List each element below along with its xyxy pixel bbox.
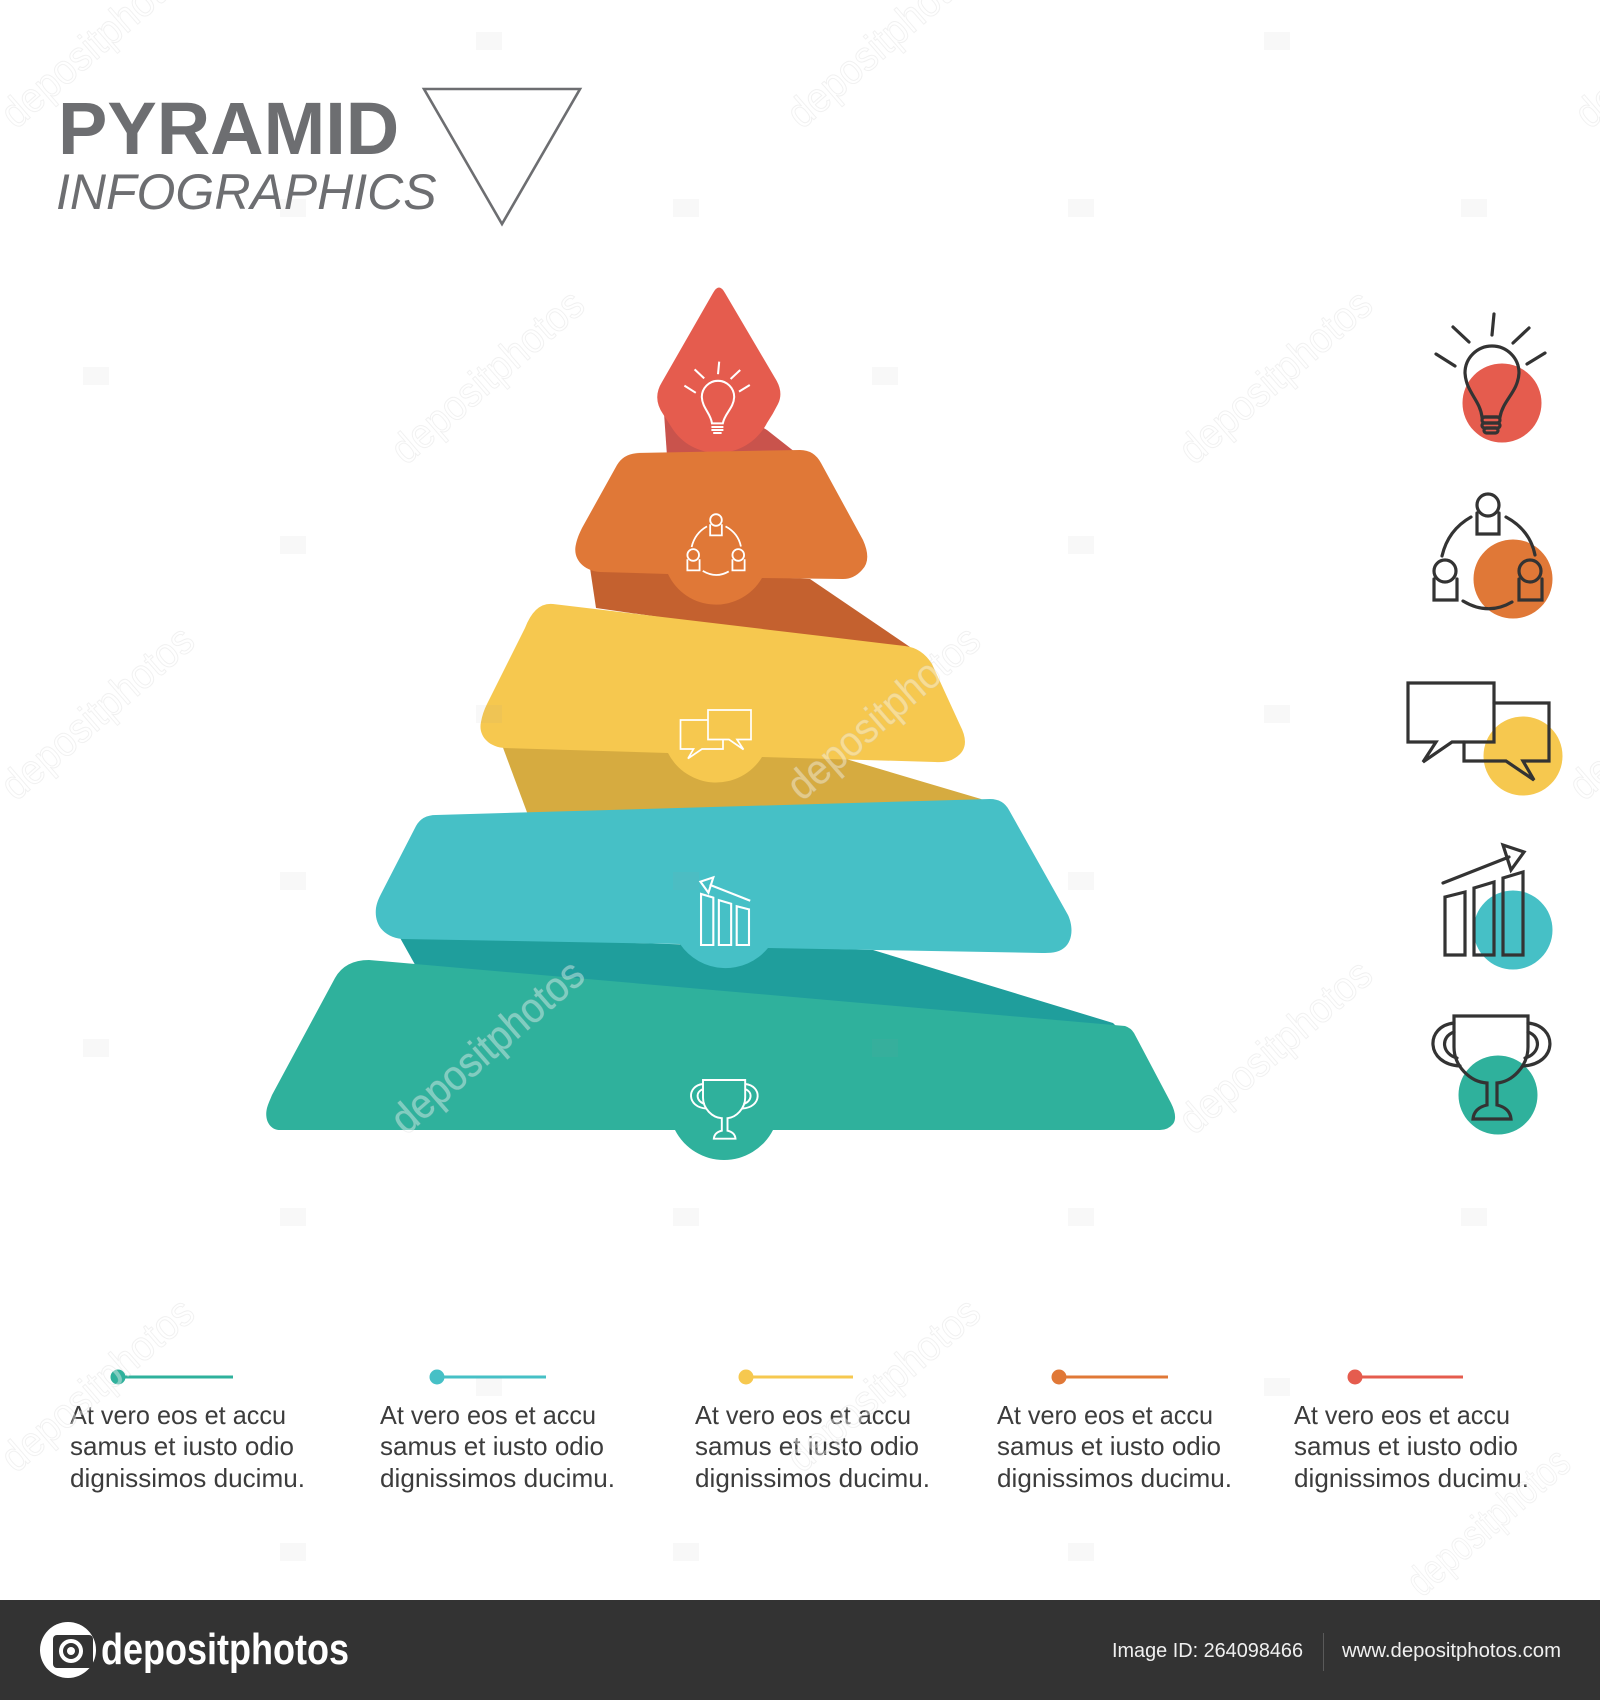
icon: small trophy (691, 1080, 758, 1139)
legend item: teal: At vero eos et accu (380, 1402, 596, 1430)
legend item: teal: dignissimos ducimu. (380, 1465, 615, 1493)
legend item: orange: samus et iusto odio (997, 1433, 1221, 1461)
icon: small lightbulb (684, 362, 750, 433)
watermark layer: depositphotos (1169, 950, 1381, 1143)
watermark layer: depositphotos (777, 616, 989, 809)
footer image id: Image ID: 264098466 (1112, 1640, 1303, 1662)
legend item: teal (380, 1370, 615, 1493)
pyramid chart (266, 288, 1175, 1160)
icon: footer camera logo (40, 1622, 96, 1678)
watermark layer: depositphotos (381, 280, 593, 473)
legend item: red: At vero eos et accu (1294, 1402, 1510, 1430)
tier 5 green (266, 960, 1175, 1160)
legend item: green (70, 1370, 305, 1493)
title: INFOGRAPHICS (56, 164, 437, 220)
tier 1 red (657, 288, 800, 456)
footer website: www.depositphotos.com (1341, 1640, 1561, 1662)
icon: large trophy (1433, 1016, 1550, 1134)
tier 3 yellow (480, 604, 990, 815)
tier 4 teal (376, 799, 1120, 1030)
icon: large bar chart (1443, 845, 1552, 970)
legend item: red: samus et iusto odio (1294, 1433, 1518, 1461)
footer divider (1323, 1633, 1324, 1671)
title: PYRAMID (58, 87, 399, 170)
icon: small bar chart (700, 877, 750, 945)
legend item: orange (997, 1370, 1232, 1493)
legend item: orange: dignissimos ducimu. (997, 1465, 1232, 1493)
legend item: green: dignissimos ducimu. (70, 1465, 305, 1493)
legend item: red: dignissimos ducimu. (1294, 1465, 1529, 1493)
footer brand name: depositphotos (101, 1625, 349, 1674)
title (56, 87, 437, 220)
legend item: yellow: At vero eos et accu (695, 1402, 911, 1430)
icon: large people cycle (1434, 494, 1552, 618)
icon: small speech bubbles (680, 710, 751, 758)
legend item: green: At vero eos et accu (70, 1402, 286, 1430)
icon: large speech bubbles (1408, 683, 1562, 796)
watermark layer: depositphotos (777, 1288, 989, 1481)
icon: small people cycle (687, 514, 745, 575)
watermark layer: depositphotos (381, 950, 593, 1143)
watermark layer: depositphotos (1169, 280, 1381, 473)
footer bar (0, 1600, 1600, 1700)
legend item: yellow: dignissimos ducimu. (695, 1465, 930, 1493)
legend item: green: samus et iusto odio (70, 1433, 294, 1461)
legend item: yellow (695, 1370, 930, 1493)
legend item: red (1294, 1370, 1529, 1493)
tier 2 orange (575, 450, 910, 652)
icon: outlined inverted triangle (424, 89, 580, 224)
icon: large lightbulb (1436, 314, 1545, 442)
legend item: orange: At vero eos et accu (997, 1402, 1213, 1430)
legend item: yellow: samus et iusto odio (695, 1433, 919, 1461)
legend item: teal: samus et iusto odio (380, 1433, 604, 1461)
